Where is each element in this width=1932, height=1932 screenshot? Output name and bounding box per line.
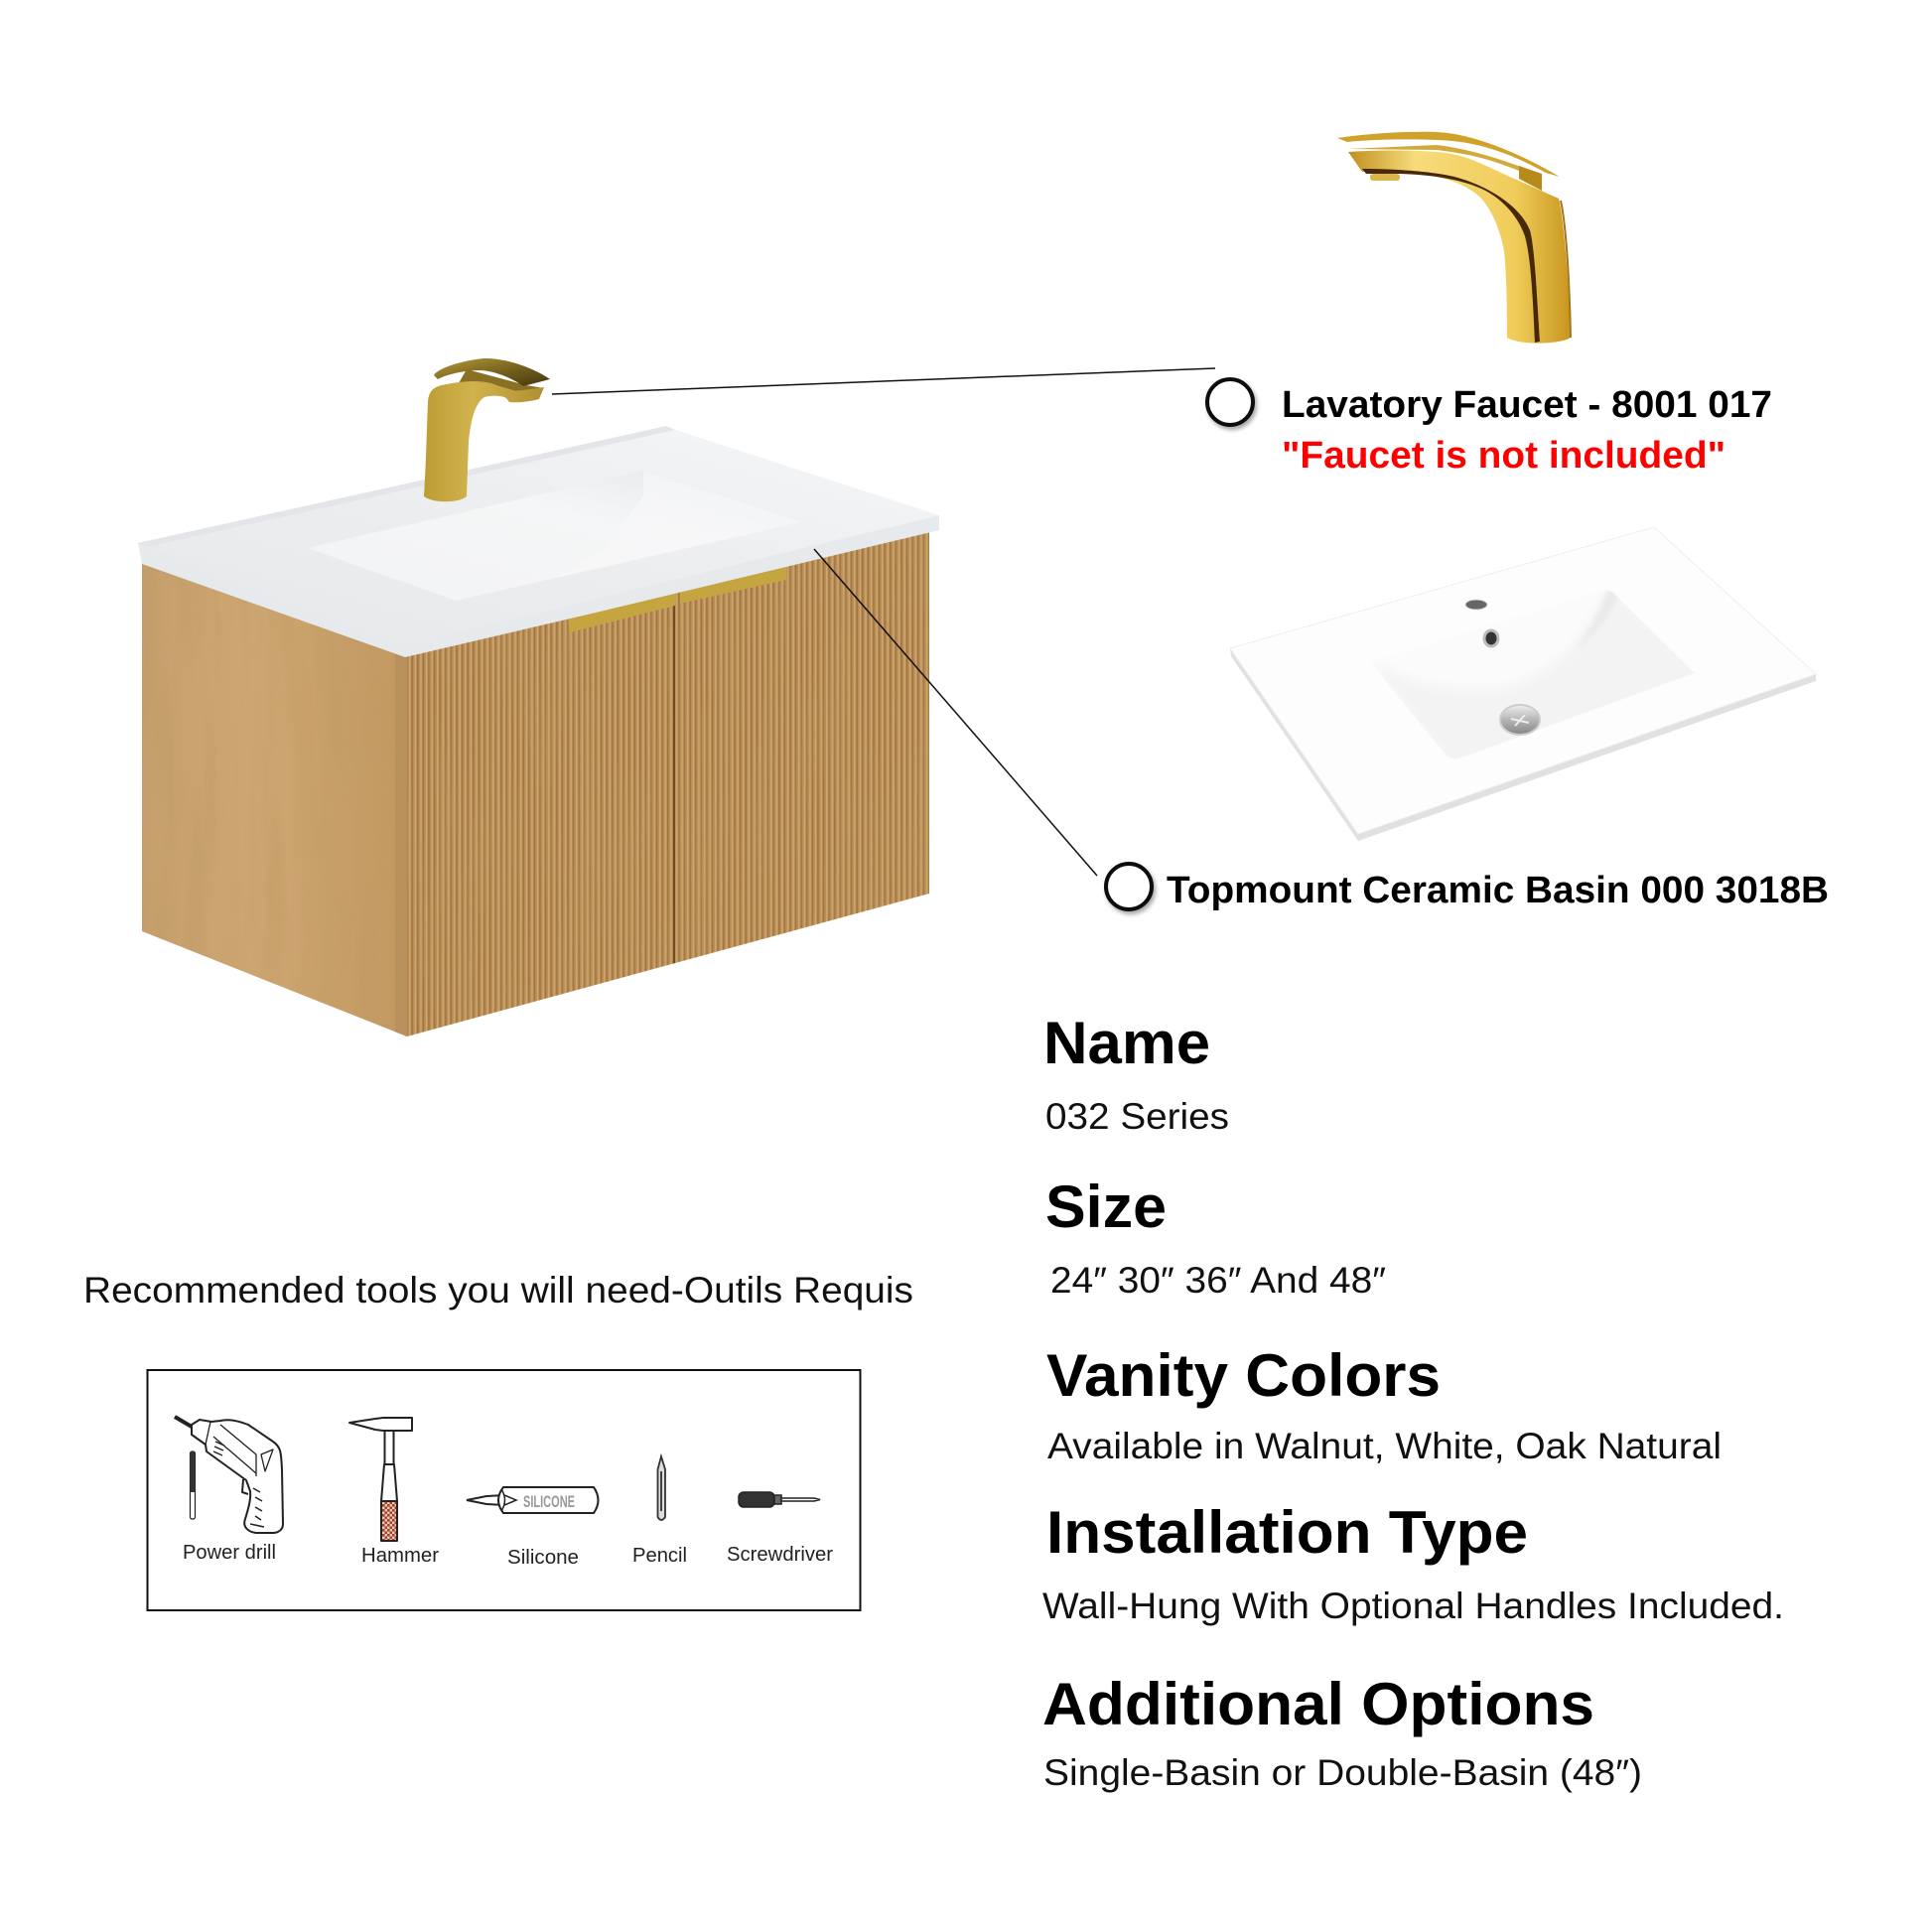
tools caption: Recommended tools you will need-Outils Requis <box>83 1270 913 1311</box>
faucet lever <box>1337 132 1560 177</box>
text: size value: 24″ 30″ 36″ And 48″ <box>1050 1260 1386 1301</box>
tools panel <box>147 1370 860 1610</box>
marker circle: faucet <box>1207 379 1253 425</box>
panel border <box>147 1370 860 1610</box>
basin edge <box>1230 648 1816 841</box>
heading: installation type: Installation Type <box>1046 1499 1528 1566</box>
icon: power drill <box>175 1417 283 1533</box>
heading: additional options: Additional Options <box>1042 1671 1594 1737</box>
label: power drill: Power drill <box>183 1542 276 1564</box>
heading: vanity colors: Vanity Colors <box>1046 1342 1441 1409</box>
icon: hammer <box>349 1418 412 1541</box>
label: hammer: Hammer <box>361 1545 439 1567</box>
drain <box>1500 705 1540 735</box>
polished gold faucet <box>1337 132 1571 344</box>
label: basin: Topmount Ceramic Basin 000 3018B <box>1167 870 1829 911</box>
aerator <box>1370 174 1400 181</box>
back lip of countertop <box>138 426 675 547</box>
bowl back shading <box>556 471 801 578</box>
leader line to faucet label <box>552 368 1215 394</box>
faucet neck <box>1519 166 1542 191</box>
overflow <box>1484 630 1498 646</box>
cabinet fluted doors <box>395 526 931 1042</box>
ceramic basin <box>1230 527 1816 841</box>
body right edge <box>1561 201 1571 338</box>
faucet hole <box>1465 600 1487 610</box>
vanity cabinet with basin and faucet <box>138 358 939 1042</box>
countertop surface <box>138 427 939 644</box>
label: faucet: Lavatory Faucet - 8001 017 <box>1282 384 1772 426</box>
label: silicone: Silicone <box>507 1547 579 1569</box>
basin bowl <box>1392 590 1694 759</box>
heading: size: Size <box>1045 1173 1167 1240</box>
label: pencil: Pencil <box>632 1545 687 1567</box>
spout underside highlight <box>1362 169 1540 343</box>
basin top <box>1230 527 1816 834</box>
text: options value: Single-Basin or Double-Basin (48″) <box>1043 1752 1642 1793</box>
faucet body <box>424 381 544 501</box>
text: installation value: Wall-Hung With Optional Handles Included. <box>1042 1586 1784 1626</box>
icon: silicone tube: SILICONE <box>523 1492 575 1511</box>
faucet lever <box>434 358 550 386</box>
heading: name: Name <box>1043 1010 1210 1076</box>
icon: pencil <box>657 1456 665 1520</box>
door handles <box>568 565 786 632</box>
leader line to basin label <box>814 549 1097 876</box>
faucet spout and body <box>1348 151 1571 344</box>
text: name value: 032 Series <box>1045 1096 1229 1137</box>
note: faucet not included: "Faucet is not included" <box>1282 435 1725 477</box>
spout underside shadow <box>459 369 544 393</box>
sink bowl <box>308 471 801 601</box>
label: screwdriver: Screwdriver <box>727 1544 833 1566</box>
icon: screwdriver <box>739 1492 820 1507</box>
cabinet side panel <box>142 556 410 1042</box>
marker circle: basin <box>1106 864 1152 909</box>
matte gold faucet <box>424 358 550 501</box>
icon: silicone tube <box>467 1487 598 1513</box>
countertop front edge <box>138 515 939 657</box>
text: colors value: Available in Walnut, White, Oak Natural <box>1047 1426 1722 1466</box>
